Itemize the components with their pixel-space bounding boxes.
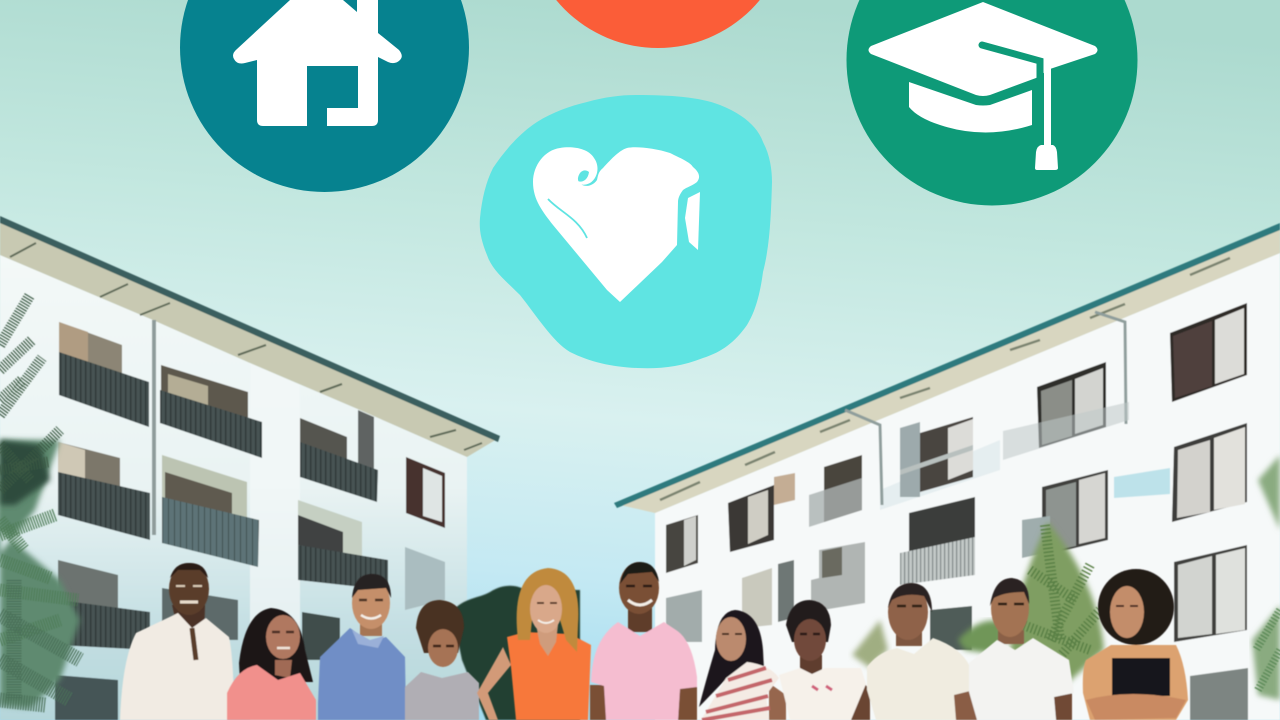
- eave underside: [616, 227, 1280, 513]
- eave underside and beams: [0, 222, 497, 457]
- person 4: child in grey shirt: [405, 600, 479, 720]
- person 9: man in cream T-shirt: [867, 583, 978, 720]
- icon: orange circle cropped at top: [526, 0, 790, 48]
- person 10: man in white T-shirt: [969, 578, 1074, 720]
- middle floor windows: [1172, 423, 1247, 522]
- person 11: woman with afro holding black folder: [1083, 569, 1188, 720]
- wall shading and drain pipe: [250, 363, 300, 720]
- person 6: man in pink polo: [590, 562, 697, 720]
- icon: heart on turquoise blob: [480, 95, 772, 368]
- right apartment building: [614, 223, 1280, 720]
- lower floor windows: [1174, 545, 1247, 642]
- person 7: woman in striped top: [699, 610, 786, 720]
- group of people: [120, 562, 1188, 720]
- person 2: woman in coral top: [227, 608, 316, 720]
- upper floor windows: [1170, 303, 1247, 402]
- person 1: man in white shirt: [120, 563, 234, 720]
- icon: graduation cap on green circle: [846, 0, 1138, 206]
- left apartment building: [0, 216, 500, 720]
- upper floor balconies: [59, 322, 122, 380]
- person 8: woman in white blouse: [779, 600, 870, 720]
- middle floor balconies: [58, 442, 120, 495]
- trees by the right building: [852, 455, 1280, 700]
- person 5: woman in orange top: [477, 568, 591, 720]
- reflections on wall: [1114, 468, 1170, 498]
- lower floor balconies: [58, 560, 118, 612]
- drain pipes: [1095, 312, 1126, 424]
- icon: house on teal circle: [180, 0, 469, 192]
- person 3: man in blue shirt: [318, 574, 406, 720]
- dark tree behind the group: [452, 586, 580, 720]
- left tree: [0, 295, 80, 708]
